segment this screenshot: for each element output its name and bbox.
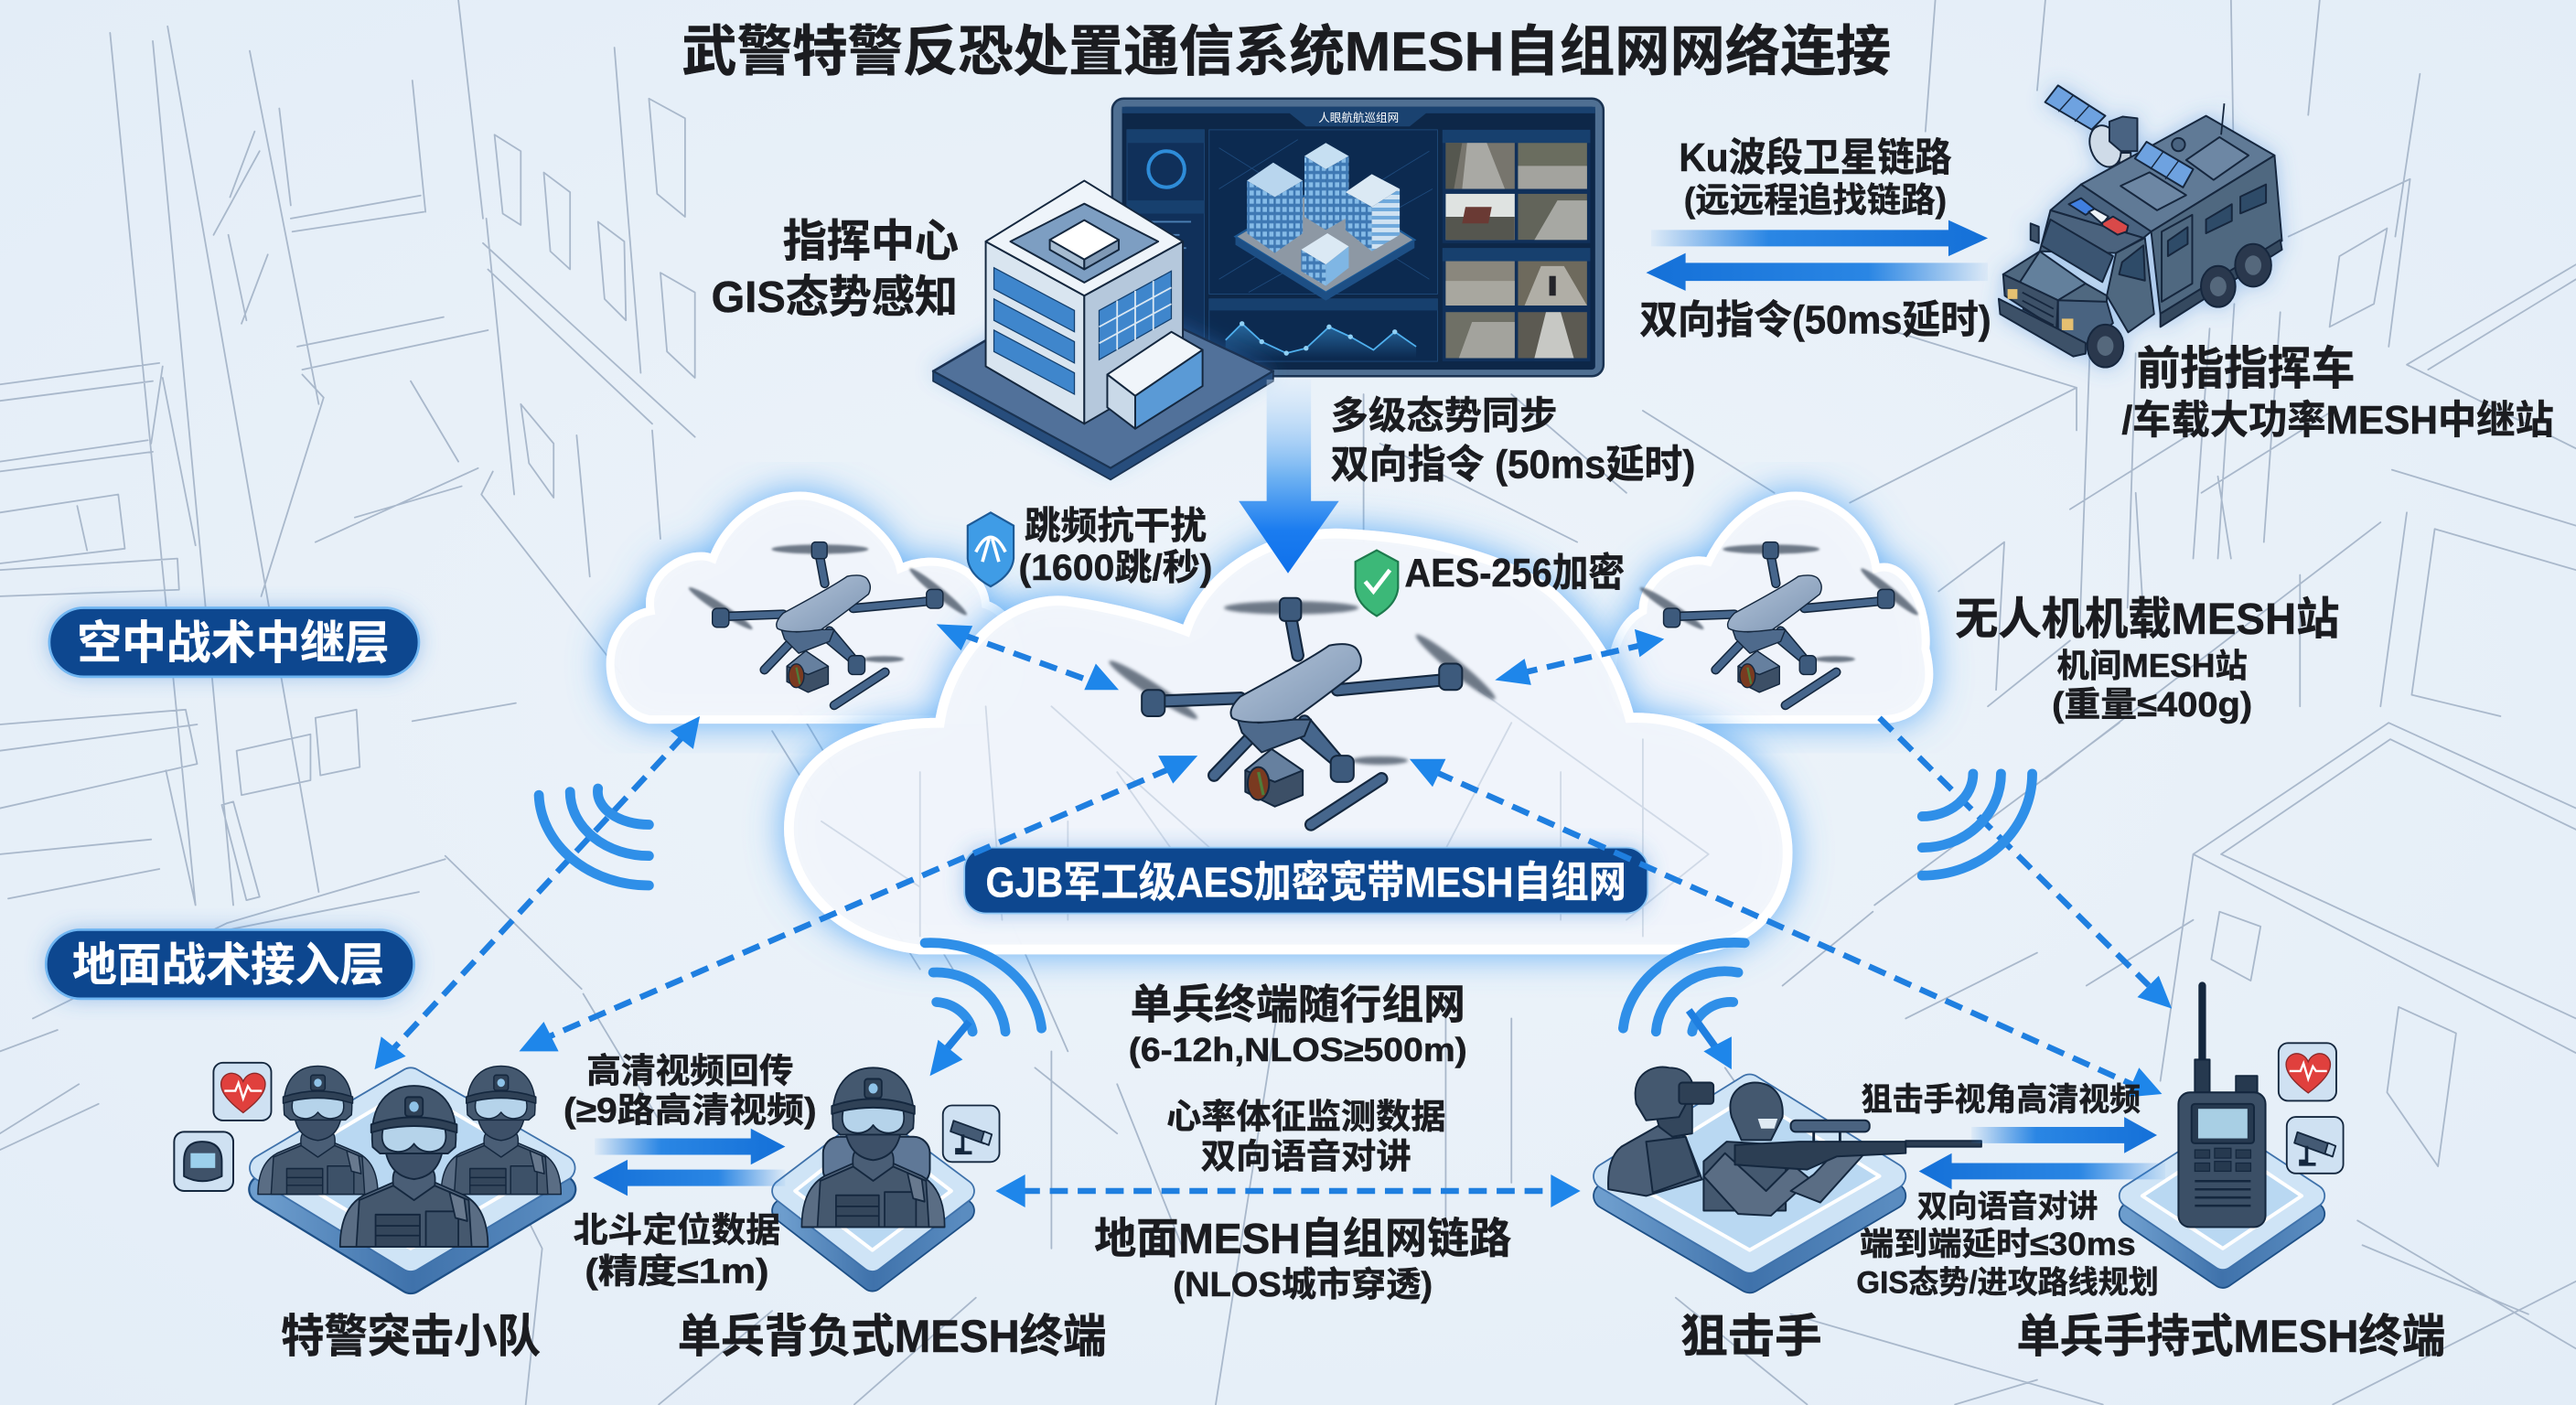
arrow: right drone link	[1495, 629, 1664, 685]
text: command centre label: GIS态势感知	[712, 273, 958, 322]
arrow: downlink from vehicle	[1647, 253, 1988, 291]
text: frequency hopping	[1018, 505, 1212, 588]
icon: signal waves lower left	[925, 943, 1042, 1032]
icon: encryption shield	[1356, 551, 1398, 616]
icon: command centre building	[933, 181, 1273, 479]
text: UAV MESH station	[1955, 595, 2339, 724]
icon: camera tile right	[2287, 1117, 2344, 1174]
label: GJB MESH network	[964, 848, 1648, 913]
text: video backhaul	[564, 1051, 817, 1130]
text: sniper view video: 狙击手视角高清视频	[1862, 1082, 2141, 1118]
icon: left drone	[686, 542, 970, 705]
arrow: right cloud to handheld terminal	[1880, 718, 2172, 1009]
text: Beidou positioning: 北斗定位数据	[574, 1211, 780, 1249]
text: frequency hopping: 跳频抗干扰	[1025, 505, 1207, 547]
icon: headset tile	[174, 1132, 233, 1191]
panel: assault team platform	[263, 1081, 562, 1280]
text: Ku-band satellite link: (远远程追找链路)	[1684, 181, 1947, 220]
arrow: data to team	[593, 1160, 785, 1196]
arrow: signal to sniper	[1689, 1010, 1732, 1069]
text: voice and latency: 双向语音对讲	[1917, 1190, 2098, 1225]
label: ground tactical access layer	[46, 929, 414, 999]
text: biometric and voice: 双向语音对讲	[1201, 1137, 1411, 1175]
text: Ku-band satellite link	[1679, 136, 1952, 220]
text: forward command vehicle label: /车载大功率MESH中继站	[2121, 399, 2554, 443]
text: bidirectional command latency: 双向指令(50ms延时)	[1639, 299, 1991, 343]
text: video backhaul: 高清视频回传	[586, 1051, 793, 1089]
text: Beidou positioning: (精度≤1m)	[585, 1252, 768, 1291]
text: multi-level sync	[1331, 395, 1695, 488]
text: multi-level sync: 双向指令 (50ms延时)	[1331, 444, 1695, 488]
text: voice and latency: 端到端延时≤30ms	[1860, 1227, 2136, 1262]
text: biometric and voice	[1166, 1098, 1445, 1175]
arrow: signal to backpack terminal	[929, 1022, 970, 1076]
icon: signal waves right	[1922, 774, 2033, 875]
icon: biometric heart tile	[213, 1063, 272, 1121]
arrow: left cloud to assault team	[374, 716, 700, 1069]
text: command centre label: 指挥中心	[783, 217, 959, 266]
panel: situational awareness monitor	[1112, 99, 1604, 376]
text: UAV MESH station: 机间MESH站	[2056, 647, 2248, 684]
text: UAV MESH station: (重量≤400g)	[2052, 685, 2252, 724]
text: biometric and voice: 心率体征监测数据	[1166, 1098, 1445, 1136]
icon: signal waves lower right	[1623, 942, 1744, 1032]
icon: biometric heart tile right	[2279, 1043, 2336, 1100]
text: squad terminal networking: (6-12h,NLOS≥500m)	[1129, 1031, 1467, 1068]
text: Beidou positioning	[574, 1211, 780, 1291]
text: UAV MESH station: 无人机机载MESH站	[1955, 595, 2339, 644]
text: ground MESH link: 地面MESH自组网链路	[1094, 1215, 1512, 1262]
text: video backhaul: (≥9路高清视频)	[564, 1091, 817, 1130]
text: backpack terminal label: 单兵背负式MESH终端	[678, 1310, 1107, 1362]
label: aerial tactical relay layer: 空中战术中继层	[77, 617, 390, 669]
label: ground tactical access layer: 地面战术接入层	[72, 938, 384, 991]
text: Ku-band satellite link: Ku波段卫星链路	[1679, 136, 1952, 180]
text: command centre label	[712, 217, 959, 322]
text: squad terminal networking: 单兵终端随行组网	[1131, 981, 1465, 1027]
text: AES-256: AES-256加密	[1405, 552, 1625, 595]
icon: centre drone	[1106, 598, 1499, 825]
text: multi-level sync: 多级态势同步	[1331, 395, 1557, 437]
panel: main MESH cloud	[789, 533, 1787, 949]
icon: handheld radio	[2178, 986, 2266, 1228]
arrow: command centre to MESH cloud	[1239, 380, 1339, 574]
text: frequency hopping: (1600跳/秒)	[1018, 548, 1212, 588]
icon: assault team soldiers	[258, 1067, 561, 1247]
arrow: centre drone to handheld terminal	[1410, 759, 2162, 1098]
text: assault team label: 特警突击小队	[281, 1310, 541, 1362]
arrow: centre drone to assault team	[520, 756, 1197, 1051]
text: sniper label: 狙击手	[1680, 1310, 1822, 1362]
arrow: ground MESH link	[995, 1174, 1581, 1207]
label: GJB MESH network: GJB军工级AES加密宽带MESH自组网	[986, 859, 1626, 906]
text: forward command vehicle label: 前指指挥车	[2137, 342, 2355, 394]
text: forward command vehicle label	[2121, 342, 2554, 443]
panel: left relay cloud	[610, 496, 1020, 720]
icon: sniper team	[1608, 1067, 1981, 1216]
icon: frequency hopping shield	[968, 512, 1014, 586]
title: 武警特警反恐处置通信系统MESH自组网网络连接	[682, 21, 1891, 82]
icon: backpack terminal soldier	[801, 1067, 945, 1228]
arrow: left drone link	[937, 624, 1119, 690]
text: ground MESH link	[1094, 1215, 1512, 1303]
arrow: video to handheld	[1971, 1117, 2157, 1153]
icon: forward command vehicle	[1999, 85, 2282, 368]
arrow: uplink to vehicle	[1651, 220, 1988, 256]
arrow: video to backpack	[595, 1129, 785, 1164]
panel: sniper platform	[1606, 1088, 1893, 1280]
label: aerial tactical relay layer	[49, 607, 419, 677]
text: voice and latency: GIS态势/进攻路线规划	[1856, 1265, 2159, 1300]
icon: signal waves left	[539, 788, 649, 885]
text: ground MESH link: (NLOS城市穿透)	[1173, 1265, 1433, 1303]
text: voice and latency	[1856, 1190, 2159, 1300]
arrow: voice to sniper	[1919, 1153, 2165, 1189]
text: squad terminal networking	[1129, 981, 1467, 1068]
icon: right drone	[1637, 542, 1921, 705]
panel: situational awareness monitor: 人眼航航巡组网	[1318, 111, 1399, 124]
icon: camera tile left	[943, 1105, 1000, 1162]
panel: backpack terminal platform	[784, 1123, 962, 1280]
text: handheld terminal label: 单兵手持式MESH终端	[2016, 1310, 2445, 1362]
panel: right relay cloud	[1612, 496, 1929, 720]
panel: handheld terminal platform	[2131, 1137, 2313, 1276]
